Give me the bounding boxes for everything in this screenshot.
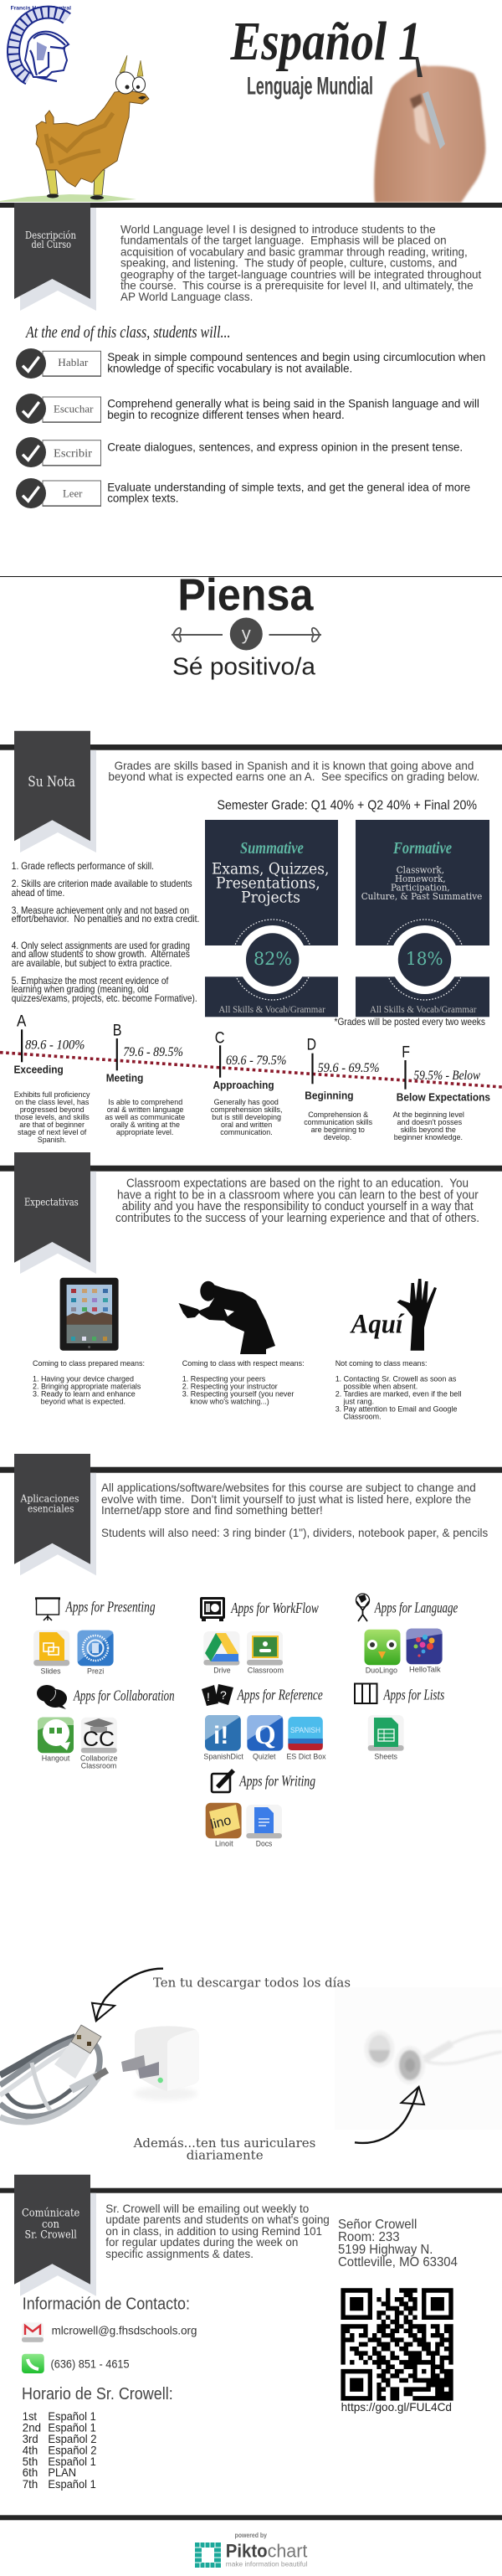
course description: the course. This course is a prerequisite for level II, and ultimately, the [120, 278, 474, 291]
panel: formative: Culture, & Past Summative [361, 890, 482, 902]
apps: collaboration: Apps for Collaboration [73, 1687, 175, 1704]
grade: A exceeding: 89.6 - 100% [25, 1038, 85, 1053]
grade: B meeting: Is able to comprehend [108, 1098, 182, 1107]
contact text: for regular updates during the week on [105, 2235, 298, 2249]
schedule: 1st [23, 2409, 37, 2423]
applications intro [101, 1481, 488, 1539]
caption: prepared: 3. Ready to learn and enhance [33, 1389, 136, 1399]
app: linoit: Linoit [215, 1840, 233, 1849]
grading rules list: and allow students to show growth. Alternates [12, 948, 190, 960]
contact text: on in class, in addition to using Remind 101 [105, 2224, 322, 2238]
footer: piktochart branding: Pikto [226, 2540, 268, 2561]
photo: charging cable [0, 2025, 107, 2122]
grading rules list: 1. Grade reflects performance of skill. [12, 860, 154, 872]
caption: prepared: Coming to class prepared means: [33, 1359, 145, 1368]
email row [22, 2322, 197, 2342]
section ribbon: descripción: Descripción [25, 229, 76, 241]
grade: C approaching: Generally has good [214, 1098, 279, 1107]
caption: respect: know who's watching...) [190, 1397, 269, 1406]
photo: power adapter [121, 2026, 199, 2100]
expectations intro: Classroom expectations are based on the right to an education. You [126, 1177, 469, 1191]
icon: tablet [60, 1278, 119, 1351]
address: Cottleville, MO 63304 [338, 2255, 458, 2269]
section ribbon: su nota: Su Nota [28, 774, 75, 791]
app: hangout: Hangout [42, 1754, 70, 1764]
objective: escuchar: Escuchar [54, 403, 94, 415]
schedule: Español 2 [48, 2432, 97, 2445]
app: classroom [247, 1631, 284, 1676]
heading: sé positivo/a: Sé positivo/a [172, 654, 316, 681]
grade: C approaching: Approaching [213, 1079, 274, 1091]
section ribbon: contact [14, 2175, 96, 2296]
apps: collaboration [37, 1685, 175, 1771]
earbuds reminder [133, 2136, 315, 2162]
caption: prepared: beyond what is expected. [41, 1397, 126, 1406]
apps: language: Apps for Language [374, 1599, 458, 1615]
applications intro: Internet/app store and find something better! [101, 1503, 323, 1517]
grading rules list: are available, but subject to extra practice. [12, 957, 172, 969]
grade scale dotted line [0, 1053, 502, 1087]
footer: piktochart branding: make information beautiful [226, 2560, 308, 2568]
caption: prepared: 2. Bringing appropriate materials [33, 1382, 141, 1391]
grass [0, 194, 136, 202]
section ribbon: su nota [14, 731, 96, 853]
schedule: PLAN [48, 2465, 76, 2479]
grade: D beginning: 59.6 - 69.5% [318, 1061, 380, 1075]
marker [423, 91, 445, 149]
apps: writing [206, 1770, 315, 1849]
earbuds reminder: diariamente [187, 2147, 264, 2162]
caption: absence [336, 1359, 462, 1421]
objective: hablar: Hablar [58, 356, 89, 368]
panel: summative [205, 820, 338, 1017]
grade: A exceeding: Exceeding [13, 1064, 64, 1076]
divider bar [0, 744, 502, 750]
grade: F below expectations: skills beyond the [401, 1126, 456, 1135]
grade: C approaching: comprehension skills, [211, 1105, 283, 1115]
app: es dict box: ES Dict Box [286, 1753, 326, 1762]
panel: formative: Formative [392, 839, 452, 858]
footer: piktochart branding: powered by [234, 2532, 267, 2539]
objective: hablar: Speak in simple compound sentences and begin using circumlocution when [107, 350, 485, 363]
applications intro: All applications/software/websites for this course are subject to change and [101, 1481, 476, 1494]
schedule heading: Horario de Sr. Crowell: [22, 2385, 173, 2403]
grade: B meeting: Meeting [106, 1073, 143, 1084]
objective: escuchar: begin to recognize different tenses when heard. [107, 408, 345, 421]
apps: presenting [33, 1597, 156, 1677]
app: collaborize classroom: Collaborize [80, 1754, 117, 1764]
icon: raised hand with aquí [350, 1279, 437, 1351]
panel: formative: Classwork, [397, 864, 444, 876]
apps: reference [202, 1684, 326, 1762]
grade: C approaching: C [215, 1030, 225, 1048]
panel: summative: Projects [241, 888, 300, 906]
right eye [132, 77, 146, 92]
address: 5199 Highway N. [338, 2243, 433, 2257]
grade: A exceeding [13, 1013, 90, 1145]
grade: D beginning: D [307, 1036, 316, 1054]
footer: piktochart branding [195, 2532, 308, 2568]
grade: B meeting: orally & writing at the [110, 1121, 180, 1130]
app: collaborize classroom [80, 1718, 117, 1771]
course description: AP World Language class. [120, 290, 253, 303]
app: drive [203, 1631, 239, 1676]
objective: escribir: Escribir [54, 448, 92, 461]
arrow to earbuds [355, 2087, 424, 2143]
objective: escribir [16, 437, 463, 467]
grade: B meeting [105, 1023, 185, 1137]
grade: B meeting: oral & written language [107, 1105, 183, 1115]
panel: formative: Participation, [391, 882, 450, 894]
grading rules list: learning when grading (meaning, old [12, 983, 149, 995]
section ribbon: contact: Comúnicate [22, 2208, 80, 2220]
school logo: Francis Howell Central [11, 5, 71, 12]
app: hellotalk: HelloTalk [409, 1666, 441, 1675]
grade: B meeting: 79.6 - 89.5% [123, 1045, 183, 1059]
hooves [47, 194, 59, 198]
hand with marker [374, 57, 485, 203]
app: collaborize classroom: CC [83, 1728, 115, 1751]
grade: F below expectations: 59.5% - Below [413, 1069, 480, 1083]
grade: C approaching: communication. [220, 1128, 273, 1137]
panel: summative: All Skills & Vocab/Grammar [218, 1003, 325, 1015]
grade: D beginning: are beginning to [311, 1126, 365, 1135]
grading rules list: effort/behavior. No penalties and no extra credit. [12, 913, 199, 925]
app: spanishdict: i! [213, 1722, 228, 1749]
section ribbon: descripción [14, 203, 96, 311]
caption: absence: possible when absent. [343, 1382, 417, 1391]
contact text: specific assignments & dates. [105, 2247, 254, 2260]
app: prezi [78, 1631, 114, 1677]
grading rules list: 4. Only select assignments are used for grading [12, 940, 190, 951]
caption: respect: 3. Respecting yourself (you never [182, 1389, 294, 1399]
panel: summative: Summative [240, 839, 304, 858]
earbuds reminder: Además...ten tus auriculares [133, 2136, 315, 2151]
caption: absence: 2. Tardies are marked, even if the bell [336, 1389, 462, 1399]
grade: C approaching: 69.6 - 79.5% [226, 1054, 286, 1068]
grade: A exceeding: stage of next level of [18, 1128, 87, 1137]
schedule: 4th [23, 2443, 38, 2456]
expectations intro [115, 1177, 479, 1225]
ornament: y connector [172, 618, 321, 650]
grade: B meeting: as well as communicate [105, 1113, 185, 1122]
schedule: 5th [23, 2455, 38, 2468]
contact heading: Información de Contacto: [23, 2295, 190, 2314]
divider bar [0, 2515, 502, 2520]
caption: respect: 1. Respecting your peers [182, 1374, 266, 1383]
objectives heading: At the end of this class, students will... [24, 323, 231, 342]
phone row: (636) 851 - 4615 [50, 2357, 130, 2370]
caption: absence: Classroom. [343, 1412, 382, 1421]
apps: language [356, 1594, 458, 1676]
caption: absence: 3. Pay attention to Email and Google [336, 1404, 457, 1414]
grade: F below expectations: and doesn't posses [397, 1118, 462, 1127]
app: es dict box: SPANISH [290, 1726, 320, 1734]
grade: A exceeding: those levels, and skills [15, 1113, 90, 1122]
contact text [105, 2202, 330, 2260]
schedule: Español 2 [48, 2443, 97, 2456]
footer: piktochart branding: chart [268, 2540, 307, 2561]
panel: formative: All Skills & Vocab/Grammar [370, 1003, 476, 1015]
apps: writing: Apps for Writing [239, 1772, 315, 1789]
grade: A exceeding: progressed beyond [20, 1105, 85, 1115]
apps: reference: ! [207, 1690, 210, 1703]
section ribbon: aplicaciones: esenciales [28, 1503, 74, 1515]
ornament: y connector: y [242, 623, 251, 644]
left eye [115, 72, 136, 94]
app: collaborize classroom: Classroom [81, 1762, 116, 1771]
arrow to charger [92, 1969, 163, 2021]
icon: raised hand with aquí: Aquí [350, 1310, 405, 1340]
schedule: Español 1 [48, 2420, 96, 2434]
grade: F below expectations: F [402, 1044, 410, 1062]
course description: fundamentals of the target language. Emphasis will be placed on [120, 234, 447, 247]
course description [120, 222, 481, 303]
grade: D beginning: communication skills [304, 1118, 372, 1127]
objective: hablar: knowledge of specific vocabulary is not available. [107, 362, 352, 375]
app: drive: Drive [213, 1667, 231, 1676]
app: sheets: Sheets [374, 1753, 397, 1762]
schedule [23, 2409, 97, 2491]
section ribbon: descripción: del Curso [32, 239, 71, 250]
expectations intro: ability and you have the responsibility to conduct yourself in a way that [122, 1199, 474, 1213]
grade: D beginning: Beginning [305, 1090, 353, 1102]
section ribbon: aplicaciones [14, 1454, 96, 1575]
apps: reference: Apps for Reference [237, 1686, 323, 1703]
email row: mlcrowell@g.fhsdschools.org [52, 2323, 197, 2336]
objective: escuchar [16, 394, 479, 424]
course description: acquisition of vocabulary and basic grammar through reading, writing, [120, 245, 468, 258]
grade: D beginning: develop. [324, 1133, 351, 1142]
contact text: Sr. Crowell will be emailing out weekly to [105, 2202, 309, 2215]
app: spanishdict [203, 1715, 243, 1762]
objective: leer: complex texts. [107, 492, 179, 505]
left ear [120, 55, 127, 73]
grading rules list [12, 860, 199, 1004]
objective: escuchar: Comprehend generally what is being said in the Spanish language and will [107, 397, 479, 410]
subtitle: Lenguaje Mundial [247, 73, 373, 100]
grading rules list: quizzes/exams, projects, etc. become Formative). [12, 992, 197, 1004]
apps: presenting: Apps for Presenting [65, 1598, 156, 1615]
panel: summative: Exams, Quizzes, [212, 859, 329, 878]
schedule: Español 1 [48, 2409, 96, 2423]
section ribbon: contact: Sr. Crowell [25, 2229, 77, 2242]
grading rules list: 3. Measure achievement only and not based on [12, 904, 189, 916]
panel: summative: 82% [254, 949, 292, 969]
app: quizlet [247, 1715, 283, 1762]
app: quizlet: Quizlet [253, 1753, 276, 1762]
objective: leer: Evaluate understanding of simple texts, and get the general idea of more [107, 481, 470, 494]
grade: F below expectations: Below Expectations [397, 1092, 490, 1104]
photo background: earbuds [335, 1987, 502, 2130]
grade: D beginning [304, 1036, 380, 1142]
panel: formative: 18% [406, 949, 443, 969]
grade: A exceeding: A [17, 1013, 27, 1031]
grading intro [108, 759, 479, 783]
app: classroom: Classroom [248, 1667, 284, 1676]
objective: leer: Leer [63, 487, 83, 499]
grade: F below expectations [393, 1044, 490, 1142]
phone row [22, 2354, 130, 2373]
objective: escribir: Create dialogues, sentences, and express opinion in the present tense. [107, 440, 463, 454]
grade: B meeting: appropriate level. [116, 1128, 173, 1137]
divider bar [0, 2188, 502, 2193]
legs [46, 170, 105, 195]
icon: bowing man [179, 1281, 275, 1354]
qr url: https://goo.gl/FUL4Cd [341, 2400, 452, 2414]
grade: A exceeding: Spanish. [38, 1136, 66, 1145]
section ribbon: contact: con [42, 2218, 60, 2231]
caption: prepared: 1. Having your device charged [33, 1374, 134, 1383]
caption: respect [182, 1359, 305, 1406]
app: slides [33, 1631, 69, 1677]
app: duolingo: DuoLingo [366, 1667, 397, 1676]
panel: formative [356, 820, 489, 1017]
objective: leer [16, 478, 470, 508]
grading intro: Grades are skills based in Spanish and it is known that going above and [115, 759, 474, 772]
app: quizlet: Q [254, 1720, 276, 1750]
address: Señor Crowell [338, 2218, 417, 2232]
caption: respect: Coming to class with respect means: [182, 1359, 305, 1368]
course description: speaking, and listening. The study of people, culture, customs, and [120, 256, 457, 270]
app: linoit [206, 1803, 242, 1849]
charge reminder: Ten tu descargar todos los días [153, 1975, 351, 1990]
course description: geography of the target-language countries will be integrated throughout [120, 267, 481, 281]
schedule: 6th [23, 2465, 38, 2479]
right ear [137, 60, 143, 76]
address [338, 2218, 458, 2269]
schedule: 3rd [23, 2432, 38, 2445]
panel: formative: Homework, [395, 873, 446, 884]
divider bar [0, 203, 502, 208]
grade: A exceeding: are that of beginner [19, 1121, 85, 1130]
applications intro: evolve with time. Don't limit yourself to just what is listed here, explore the [101, 1492, 471, 1506]
schedule: Español 1 [48, 2477, 96, 2491]
grade: C approaching: but is still developing [212, 1113, 281, 1122]
course description: World Language level I is designed to introduce students to the [120, 222, 436, 235]
caption: absence: just rang. [342, 1397, 374, 1406]
grade: B meeting: B [113, 1023, 121, 1040]
grade: A exceeding: on the class level, has [15, 1098, 90, 1107]
objective: hablar [16, 348, 485, 379]
grade: D beginning: Comprehension & [308, 1110, 369, 1120]
app: slides: Slides [40, 1667, 61, 1677]
app: prezi: Prezi [87, 1667, 104, 1677]
section ribbon: aplicaciones: Aplicaciones [20, 1493, 79, 1505]
apps: workflow: Apps for WorkFlow [231, 1600, 319, 1616]
heading: piensa: Piensa [177, 569, 314, 620]
front hoof [90, 196, 104, 199]
grade: C approaching: oral and written [221, 1121, 272, 1130]
llama illustration [0, 55, 149, 202]
qr code [341, 2290, 453, 2398]
app: linoit: lino [209, 1813, 233, 1832]
schedule: Español 1 [48, 2455, 96, 2468]
caption: respect: 2. Respecting your instructor [182, 1382, 278, 1391]
app: spanishdict: SpanishDict [203, 1753, 243, 1762]
grade: C approaching [211, 1030, 286, 1137]
divider bar [0, 1166, 502, 1172]
apps: lists [355, 1683, 444, 1762]
school logo [11, 5, 71, 81]
grading intro: beyond what is expected earns one an A. See specifics on grading below. [108, 770, 479, 783]
grading rules list: ahead of time. [12, 887, 64, 899]
caption: absence: 1. Contacting Sr. Crowell as soon as [336, 1374, 457, 1383]
app: hangout [38, 1718, 74, 1764]
divider bar [0, 1467, 502, 1473]
section ribbon: expectativas: Expectativas [24, 1196, 79, 1208]
app: docs: Docs [256, 1840, 273, 1849]
apps: workflow [200, 1597, 319, 1676]
panel: summative: Presentations, [216, 873, 320, 892]
apps: reference: ? [220, 1688, 227, 1702]
caption: prepared [33, 1359, 145, 1406]
grade: A exceeding: Exhibits full proficiency [14, 1090, 90, 1100]
grade: F below expectations: beginner knowledge. [394, 1133, 463, 1142]
schedule: 7th [23, 2477, 38, 2491]
section ribbon: expectativas [14, 1152, 96, 1274]
app: es dict box [286, 1717, 326, 1762]
semester grade formula: Semester Grade: Q1 40% + Q2 40% + Final 20% [218, 799, 477, 813]
grading rules list: 2. Skills are criterion made available to students [12, 878, 192, 889]
contact text: update parents and students on what's going [105, 2213, 330, 2226]
applications intro: Students will also need: 3 ring binder (1"), dividers, notebook paper, & pencils [101, 1526, 488, 1539]
grade: F below expectations: At the beginning level [393, 1110, 464, 1120]
title: Español 1 [230, 11, 422, 72]
address: Room: 233 [338, 2230, 400, 2244]
schedule: 2nd [23, 2420, 41, 2434]
apps: lists: Apps for Lists [383, 1686, 444, 1703]
body [36, 90, 149, 187]
grading rules list: 5. Emphasize the most recent evidence of [12, 975, 169, 987]
caption: absence: Not coming to class means: [336, 1359, 427, 1368]
photo: earbuds [365, 2031, 502, 2084]
